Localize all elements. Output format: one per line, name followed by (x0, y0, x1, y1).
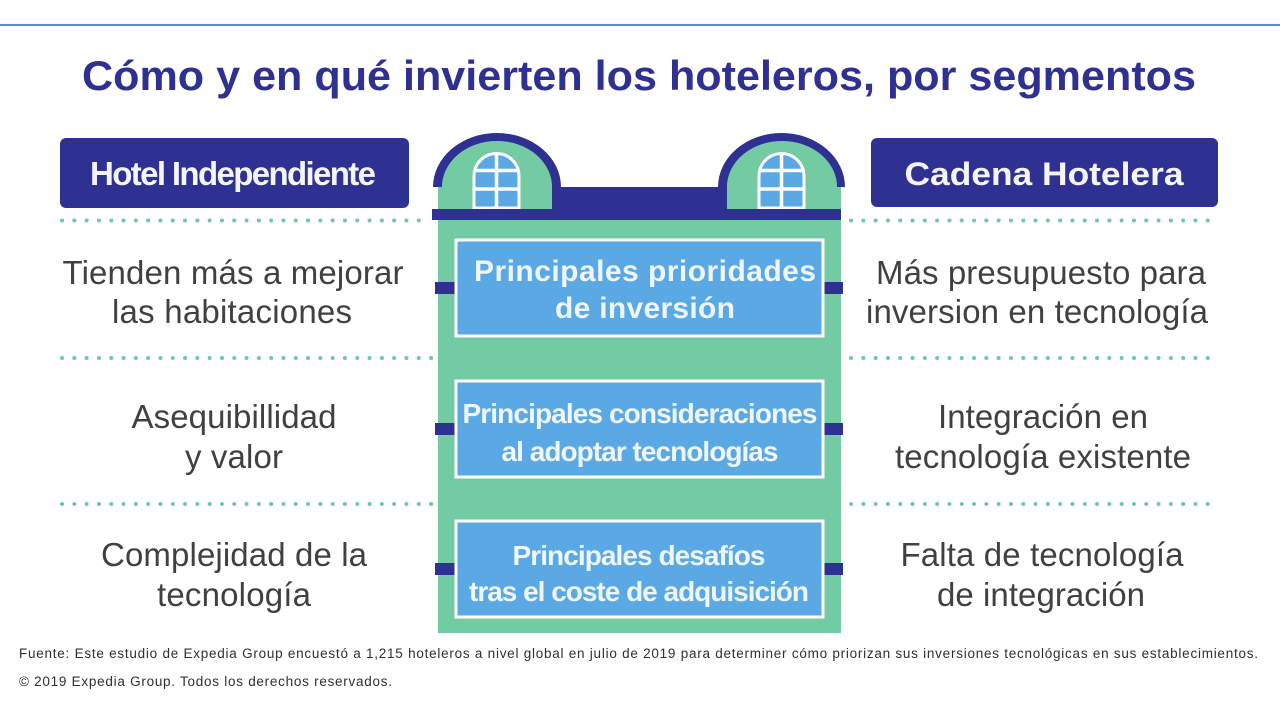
roof bar (432, 209, 841, 220)
header: Hotel Independiente (60, 138, 409, 208)
right text: row 2 (895, 398, 1191, 475)
panel: desafíos (456, 521, 823, 617)
header: Cadena Hotelera (871, 138, 1218, 207)
central roof block (552, 187, 727, 212)
connector tabs (435, 282, 843, 575)
building body (438, 215, 841, 633)
left dome (433, 133, 561, 209)
panel: prioridades: de inversión (555, 292, 735, 325)
source note: Fuente: Este estudio de Expedia Group encuestó a 1,215 hoteleros a nivel global en julio de 2019 para determiner cómo priorizan sus inversiones tecnológicas en sus establecimientos. (19, 646, 1258, 661)
panel: consideraciones (456, 381, 823, 477)
right text: row 2: tecnología existente (895, 438, 1191, 475)
right text: row 1: Más presupuesto para (876, 254, 1207, 291)
left text: row 2: Asequibillidad (132, 398, 336, 435)
left text: row 2 (132, 398, 336, 475)
right text: row 3: Falta de tecnología (900, 536, 1184, 573)
left text: row 3: Complejidad de la (101, 536, 368, 573)
panel: desafíos: Principales desafíos (512, 540, 766, 571)
header: Cadena Hotelera: Cadena Hotelera (904, 156, 1184, 192)
left window (474, 153, 519, 208)
hotel building illustration (432, 133, 845, 633)
left text: row 1: las habitaciones (112, 293, 352, 330)
right window (759, 153, 804, 208)
left text: row 1 (62, 254, 404, 330)
panel: consideraciones: Principales consideraciones (462, 398, 818, 429)
left text: row 2: y valor (185, 438, 283, 475)
left text: row 3 (101, 536, 368, 613)
panel: prioridades: Principales prioridades (474, 255, 816, 288)
left text: row 3: tecnología (157, 576, 312, 613)
right dome (718, 133, 845, 209)
right text: row 3 (900, 536, 1184, 613)
panel: desafíos: tras el coste de adquisición (469, 576, 809, 607)
right text: row 1: inversion en tecnología (866, 293, 1209, 330)
right text: row 3: de integración (937, 576, 1145, 613)
header: Hotel Independiente: Hotel Independiente (90, 155, 376, 192)
panel: consideraciones: al adoptar tecnologías (502, 436, 778, 467)
panel: prioridades (456, 240, 823, 336)
right text: row 2: Integración en (938, 398, 1148, 435)
right text: row 1 (866, 254, 1209, 330)
title: Cómo y en qué invierten los hoteleros, por segmentos (82, 52, 1196, 99)
left text: row 1: Tienden más a mejorar (62, 254, 404, 291)
copyright: © 2019 Expedia Group. Todos los derechos reservados. (19, 674, 392, 689)
